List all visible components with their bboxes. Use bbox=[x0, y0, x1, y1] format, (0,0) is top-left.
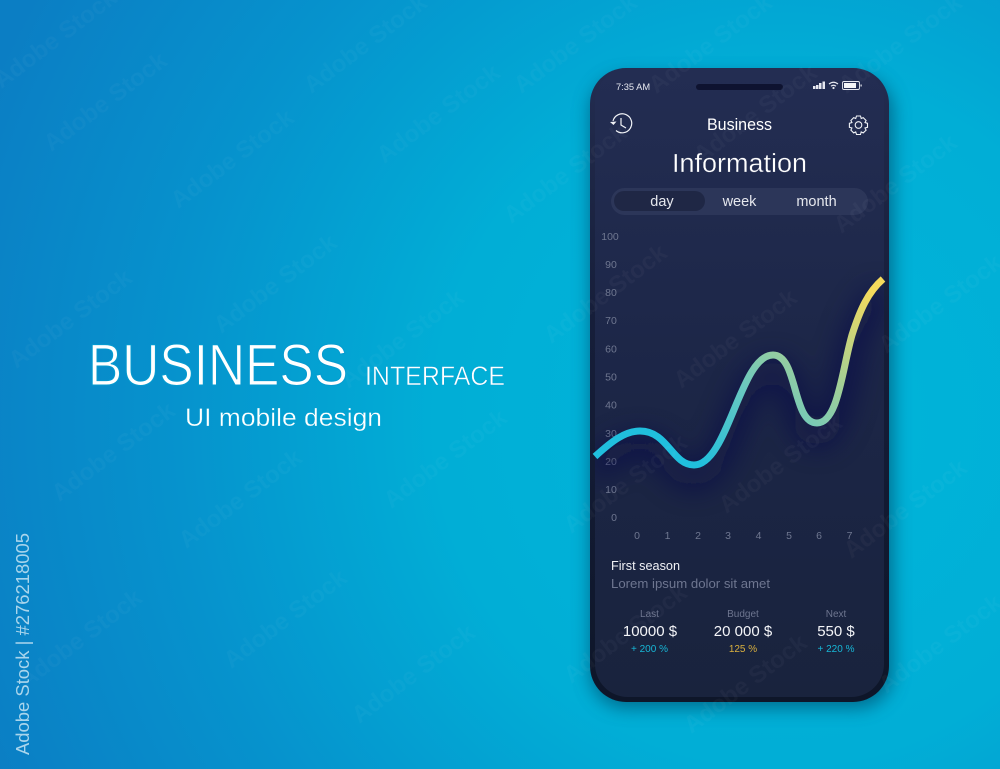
wifi icon bbox=[829, 82, 838, 88]
watermark pattern: Adobe Stock bbox=[166, 104, 300, 214]
x axis labels: 7 bbox=[847, 530, 853, 542]
stat: Budget bbox=[714, 609, 773, 655]
heading: Information: Information bbox=[672, 150, 807, 178]
y axis labels: 20 bbox=[605, 456, 617, 468]
curve shadow bbox=[595, 293, 883, 479]
watermark pattern: Adobe Stock bbox=[539, 239, 673, 349]
clock: 7:35 AM bbox=[616, 82, 650, 92]
title: BUSINESS: BUSINESS bbox=[88, 333, 348, 398]
y axis labels: 70 bbox=[605, 315, 617, 327]
heading: Business: Business bbox=[707, 116, 772, 134]
watermark pattern: Adobe Stock bbox=[379, 404, 513, 514]
x axis labels: 6 bbox=[816, 530, 822, 542]
x axis labels: 2 bbox=[695, 530, 701, 542]
tab: day: day bbox=[650, 194, 674, 210]
stat: Next: Next bbox=[826, 609, 847, 620]
x axis labels: 3 bbox=[725, 530, 731, 542]
title: INTERFACE: INTERFACE bbox=[365, 361, 505, 391]
y axis labels: 80 bbox=[605, 287, 617, 299]
y axis labels: 100 bbox=[601, 231, 619, 243]
y axis labels: 60 bbox=[605, 344, 617, 356]
active tab bbox=[614, 191, 705, 211]
watermark pattern: Adobe Stock bbox=[219, 564, 353, 674]
watermark pattern: Adobe Stock bbox=[336, 284, 470, 394]
watermark pattern: Adobe Stock bbox=[209, 229, 343, 339]
caption title: First season bbox=[611, 559, 680, 573]
stat: Last: + 200 % bbox=[631, 644, 668, 655]
phone bbox=[590, 68, 893, 708]
watermark pattern: Adobe Stock bbox=[669, 284, 803, 394]
watermark pattern: Adobe Stock bbox=[14, 584, 148, 694]
signal icon bbox=[813, 82, 825, 89]
x axis labels: 4 bbox=[756, 530, 762, 542]
caption text: Lorem ipsum dolor sit amet bbox=[611, 576, 770, 591]
stat: Next: + 220 % bbox=[818, 644, 855, 655]
watermark pattern: Adobe Stock bbox=[559, 579, 693, 689]
stat: Last: 10000 $ bbox=[623, 623, 678, 640]
phone edge bbox=[590, 68, 889, 702]
icon: settings gear bbox=[849, 116, 868, 135]
tab: week: week bbox=[722, 194, 757, 210]
watermark pattern: Adobe Stock bbox=[174, 444, 308, 554]
x axis labels: 1 bbox=[665, 530, 671, 542]
watermark pattern: Adobe Stock bbox=[39, 47, 173, 157]
x axis labels: 0 bbox=[634, 530, 640, 542]
y axis labels: 0 bbox=[611, 512, 617, 524]
stat: Last: Last bbox=[640, 609, 659, 620]
line curve bbox=[595, 279, 883, 465]
y axis labels bbox=[601, 231, 619, 524]
stat: Last bbox=[623, 609, 678, 655]
headline block bbox=[88, 333, 505, 432]
watermark pattern: Adobe Stock bbox=[714, 409, 848, 519]
battery icon bbox=[842, 82, 862, 90]
watermark pattern: Adobe Stock bbox=[689, 59, 823, 169]
watermark pattern: Adobe Stock bbox=[4, 264, 138, 374]
watermark pattern: Adobe Stock bbox=[372, 59, 506, 169]
chart bbox=[595, 231, 883, 542]
y axis labels: 90 bbox=[605, 259, 617, 271]
watermark pattern: Adobe Stock bbox=[679, 629, 813, 739]
stat: Next: 550 $ bbox=[817, 623, 855, 640]
watermark pattern: Adobe Stock bbox=[829, 129, 963, 239]
tab track bbox=[611, 188, 868, 215]
stat: Next bbox=[817, 609, 855, 655]
x axis labels bbox=[634, 530, 853, 542]
stat: Budget: Budget bbox=[727, 609, 759, 620]
y axis labels: 30 bbox=[605, 428, 617, 440]
phone screen bbox=[595, 69, 884, 697]
notch bbox=[696, 84, 783, 90]
icon: history clock bbox=[610, 114, 632, 133]
x axis labels: 5 bbox=[786, 530, 792, 542]
watermark pattern: Adobe Stock bbox=[839, 454, 973, 564]
stat: Budget: 20 000 $ bbox=[714, 623, 773, 640]
subtitle: UI mobile design bbox=[185, 404, 382, 432]
status bar bbox=[616, 82, 862, 92]
y axis labels: 10 bbox=[605, 484, 617, 496]
y axis labels: 50 bbox=[605, 372, 617, 384]
y axis labels: 40 bbox=[605, 400, 617, 412]
stock id side text: Adobe Stock | #276218005 bbox=[12, 533, 33, 755]
watermark pattern: Adobe Stock bbox=[499, 119, 633, 229]
watermark pattern: Adobe Stock bbox=[47, 397, 181, 507]
tab: month: month bbox=[796, 194, 837, 210]
watermark pattern: Adobe Stock bbox=[347, 619, 481, 729]
watermark pattern: Adobe Stock bbox=[559, 429, 693, 539]
phone shadow bbox=[590, 76, 893, 708]
caption bbox=[611, 559, 770, 591]
tab bar bbox=[611, 188, 868, 215]
stat: Budget: 125 % bbox=[729, 644, 757, 655]
